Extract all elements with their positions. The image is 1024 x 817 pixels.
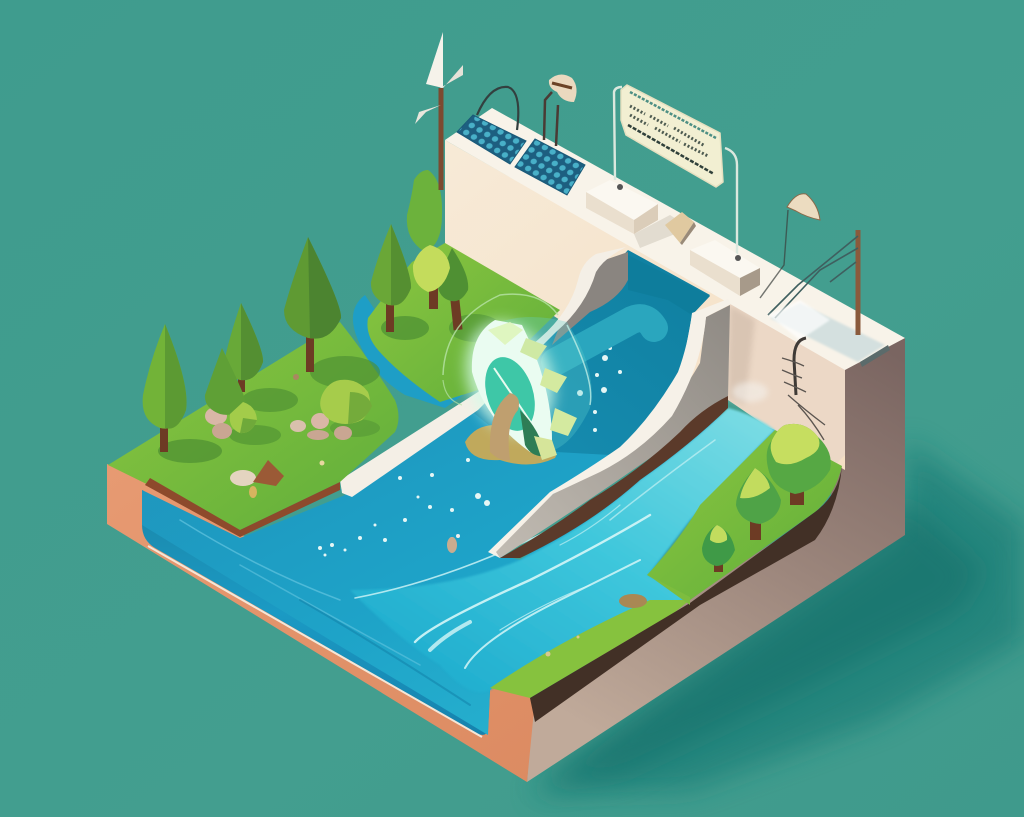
- panel cable: [477, 87, 518, 130]
- turbine base island: [465, 425, 556, 465]
- water channel behind spillway: [340, 250, 710, 550]
- conifer tree 1: [143, 324, 187, 452]
- round tree right 1: [767, 424, 831, 505]
- hydro turbine: [451, 309, 577, 460]
- base block: left terracotta face: [107, 464, 535, 782]
- right spillway brown base: [500, 396, 728, 558]
- conifer tree 2: [225, 303, 263, 392]
- left spillway wall white top: [340, 247, 626, 497]
- crate on wall: [665, 212, 696, 245]
- wall top slab: [445, 108, 905, 370]
- ground shadow: [530, 440, 1024, 795]
- cross-section of pool water: [142, 490, 490, 737]
- concrete wall right of spillway: [728, 303, 845, 470]
- base block: right outer face: [527, 338, 905, 782]
- conifer tree 4: [371, 224, 411, 332]
- wall cable cluster: [782, 338, 825, 440]
- left bank rocks: [205, 374, 352, 498]
- solar panel 2: [515, 139, 585, 195]
- right spillway wall grey face: [490, 305, 730, 558]
- right land strip: [490, 430, 842, 722]
- upper land: [367, 243, 560, 402]
- slab shaded platform: [770, 303, 890, 367]
- water sparkles: [318, 346, 622, 556]
- control box 2: [690, 240, 760, 296]
- control box 1: [586, 180, 690, 248]
- trees on upper land: [413, 245, 468, 330]
- wall mist: [732, 382, 768, 402]
- conifer tree small: [205, 348, 246, 415]
- information sign: [614, 85, 737, 255]
- right spillway white top: [488, 299, 731, 558]
- left land: [108, 322, 398, 537]
- shrub on left land: [320, 380, 372, 424]
- round tree right 3: [702, 525, 735, 572]
- upper stream: [353, 295, 470, 408]
- turbine glass dome: [443, 294, 592, 452]
- penstock pipe: [555, 318, 654, 362]
- lamp with cables: [544, 74, 577, 146]
- conifer tree 3: [284, 237, 341, 372]
- round tree right 2: [736, 468, 781, 540]
- rock in river: [447, 534, 460, 553]
- shrub small: [230, 402, 257, 433]
- rocks on lower bank: [546, 594, 647, 656]
- bright lower river: [350, 408, 775, 692]
- river foam streaks: [180, 440, 715, 705]
- dam back wall: [445, 140, 845, 470]
- wind turbine: [415, 32, 463, 190]
- utility pole with guy wires: [760, 210, 858, 340]
- solar panel 1: [457, 115, 526, 164]
- wall shading: [728, 305, 755, 405]
- main pool water: [142, 410, 775, 735]
- channel back wall: [628, 255, 710, 315]
- pole tree behind wall: [407, 170, 442, 252]
- left spillway wall grey face: [552, 252, 628, 345]
- small lamp: [787, 194, 820, 220]
